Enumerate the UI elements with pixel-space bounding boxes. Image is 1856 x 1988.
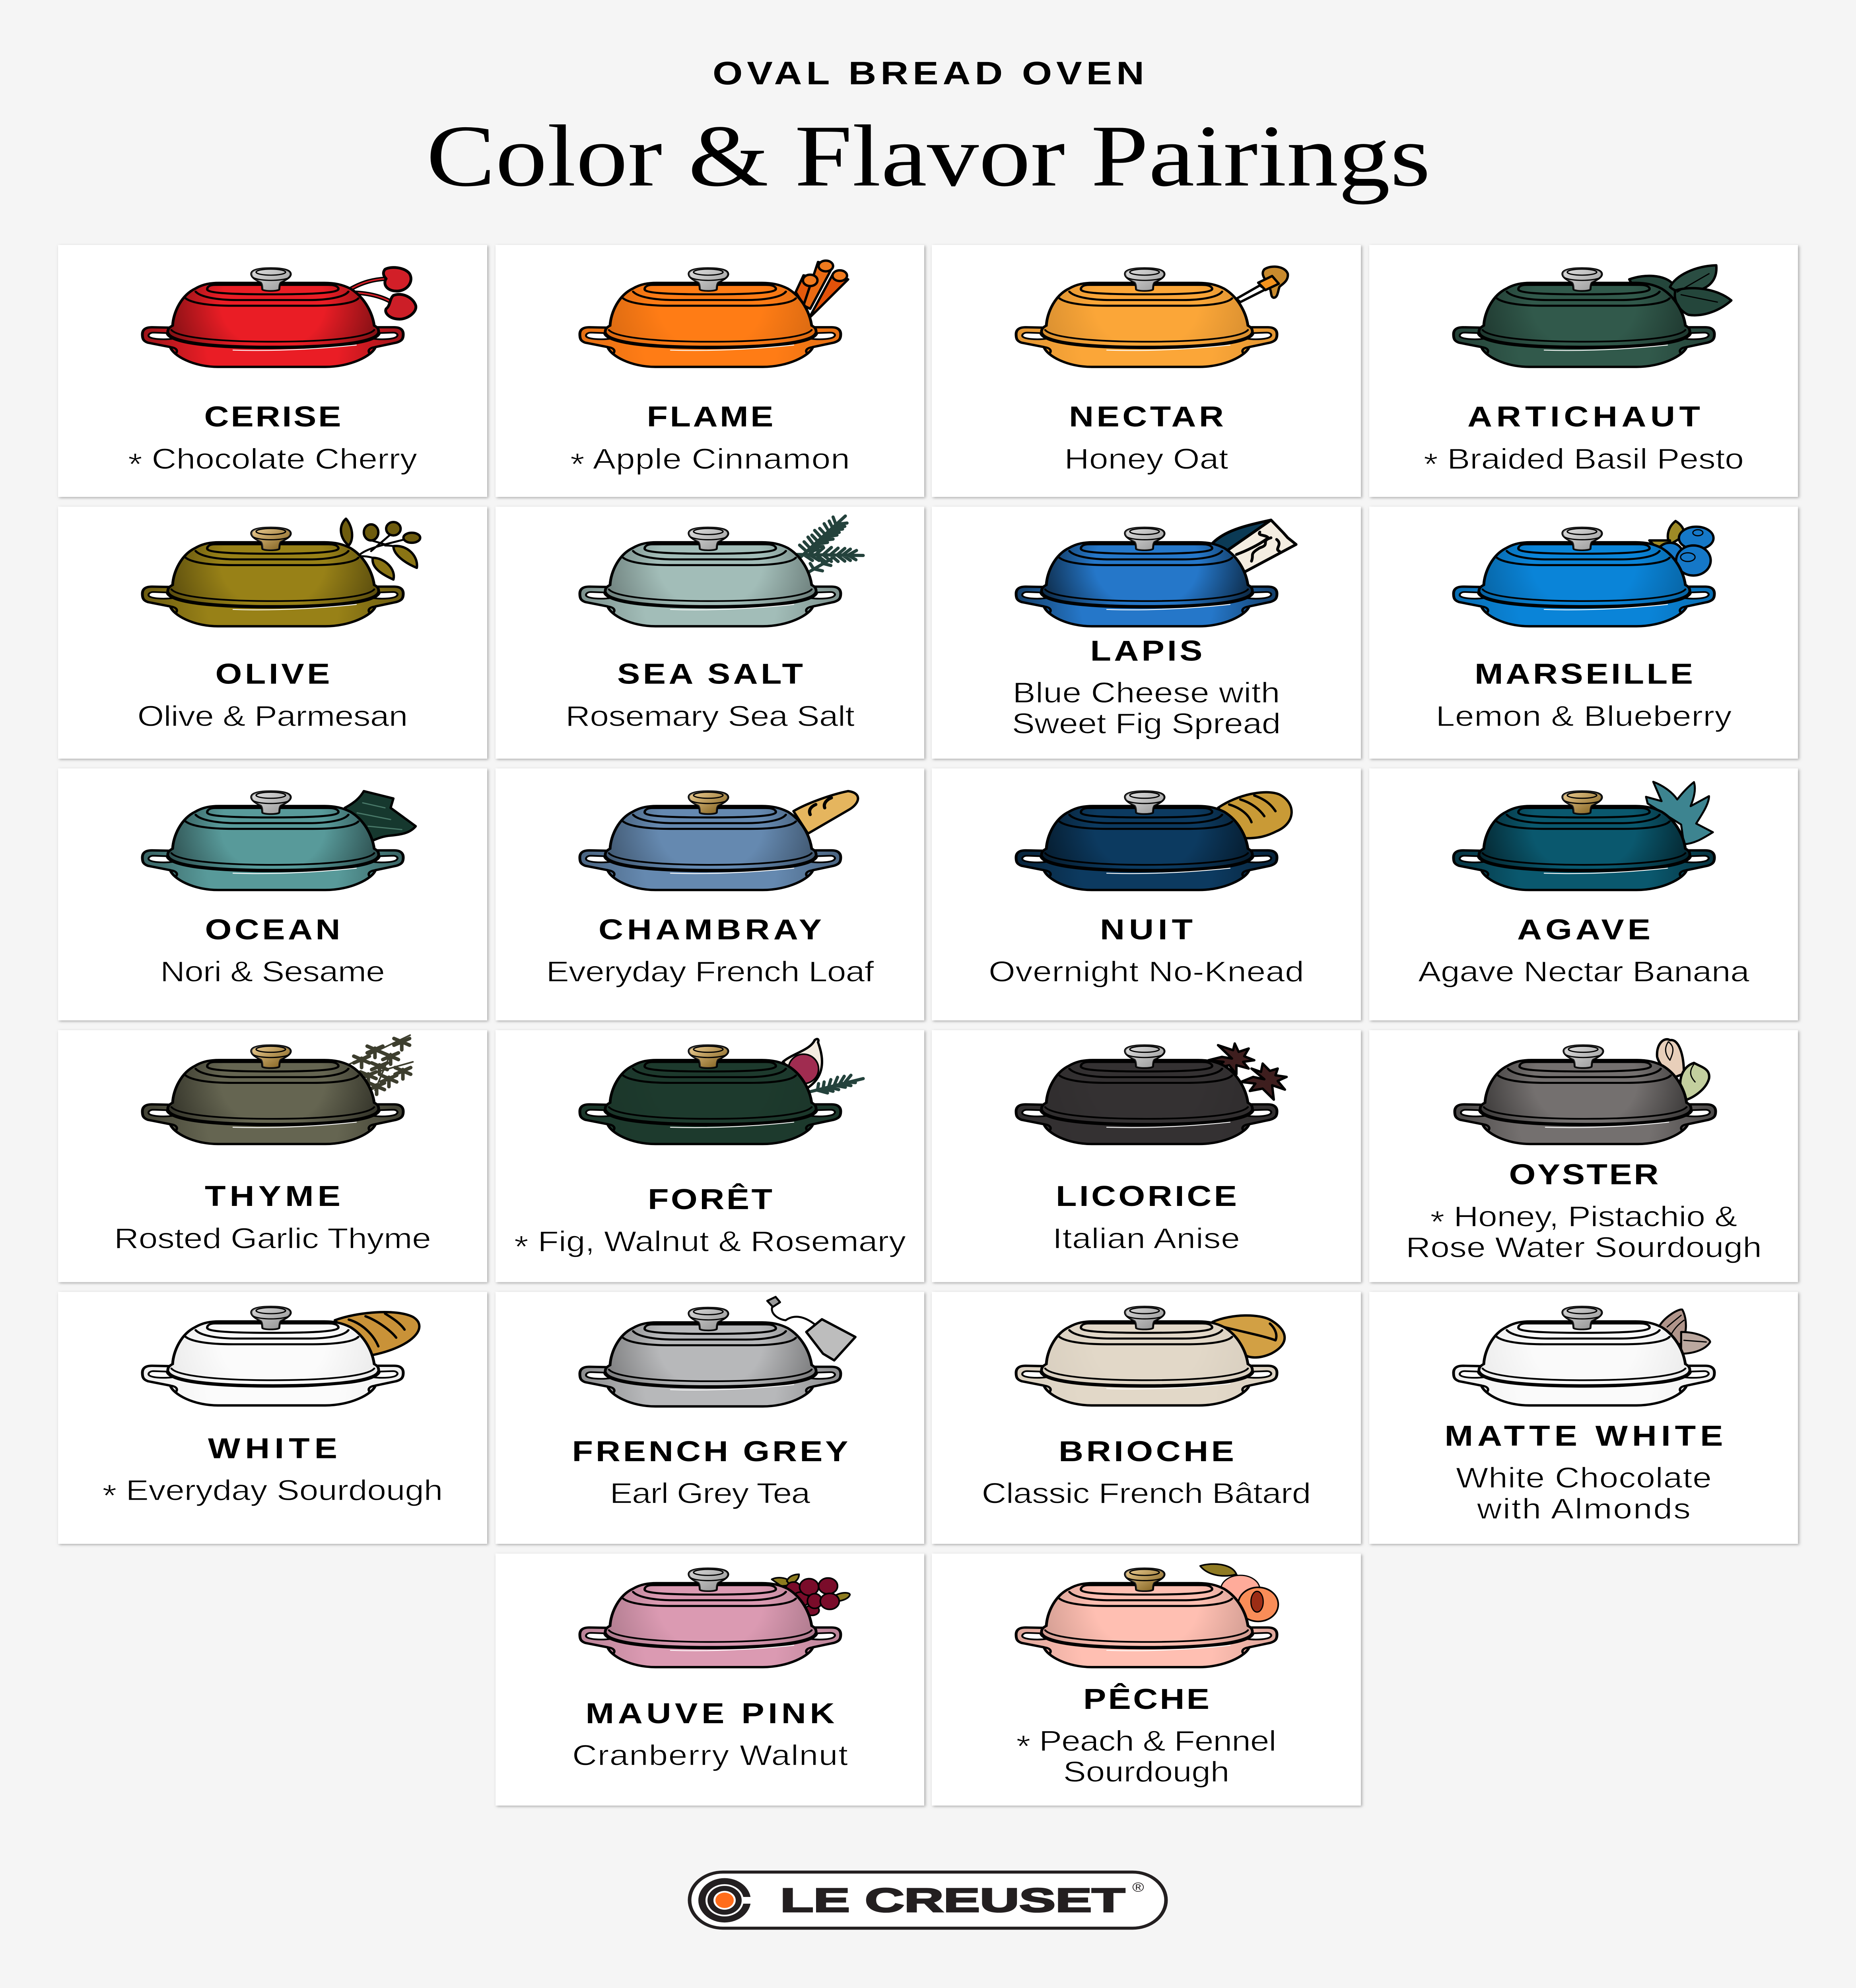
icon: baguette: [793, 791, 858, 834]
flavor: *: [103, 1479, 117, 1513]
icon: oven: [1016, 268, 1277, 367]
icon: oven: [142, 268, 403, 367]
flavor: Apple Cinnamon: [585, 443, 850, 475]
heading: FLAME: [647, 400, 773, 433]
icon: oven: [580, 528, 841, 626]
icon: sourdough loaf: [335, 1312, 419, 1355]
icon: oven: [142, 1307, 403, 1406]
heading: LICORICE: [1056, 1180, 1237, 1212]
flavor: two lines: [1012, 676, 1281, 740]
panel: White: [58, 1292, 487, 1544]
flavor: *: [570, 447, 585, 481]
icon: oven: [1454, 791, 1714, 890]
heading: NECTAR: [1069, 400, 1224, 433]
flavor: Braided Basil Pesto: [1438, 443, 1744, 475]
icon: oven: [1016, 528, 1277, 626]
flavor: Olive & Parmesan: [138, 700, 408, 732]
logo: Le Creuset: ®: [1132, 1879, 1144, 1895]
icon: oven: [1454, 268, 1714, 367]
icon: nori: [345, 791, 416, 841]
icon: thyme sprigs: [347, 1035, 413, 1094]
icon: basil leaves: [1629, 265, 1732, 315]
flavor: Rosted Garlic Thyme: [114, 1222, 431, 1254]
flavor: two lines: Sweet Fig Spread: [1012, 707, 1281, 740]
flavor: Nori & Sesame: [160, 955, 385, 988]
heading: FRENCH GREY: [572, 1435, 848, 1468]
icon: star anise: [1209, 1043, 1287, 1100]
icon: blueberries: [1649, 521, 1714, 575]
flavor: two lines: *: [1430, 1205, 1444, 1239]
heading: OYSTER: [1509, 1158, 1658, 1190]
icon: round loaf: [1218, 792, 1292, 838]
heading: CERISE: [204, 400, 341, 433]
icon: honey dipper: [1236, 267, 1288, 302]
flavor: two lines: *: [1016, 1729, 1030, 1764]
flavor: two lines: Blue Cheese with: [1013, 676, 1280, 709]
heading: PÊCHE: [1083, 1683, 1209, 1715]
panel: Thyme: [58, 1030, 487, 1282]
flavor: Chocolate Cherry: [142, 443, 417, 475]
flavor: two lines: Peach & Fennel: [1030, 1725, 1276, 1757]
panel: French Grey: [496, 1292, 924, 1544]
heading: FORÊT: [648, 1183, 772, 1215]
logo: Le Creuset: LE CREUSET: [780, 1881, 1125, 1919]
heading: BRIOCHE: [1059, 1435, 1234, 1468]
panel: Nectar: [932, 245, 1361, 497]
icon: oven: [142, 528, 403, 626]
panel: Forêt: [496, 1030, 924, 1282]
flavor: Lemon & Blueberry: [1436, 700, 1732, 732]
flavor: Cranberry Walnut: [572, 1739, 848, 1771]
flavor: two lines: [1016, 1725, 1277, 1788]
icon: cranberries: [772, 1574, 850, 1615]
panel: Nuit: [932, 769, 1361, 1020]
icon: tea bag: [767, 1297, 855, 1360]
flavor: *: [128, 447, 142, 481]
heading: WHITE: [208, 1432, 337, 1464]
panel: Oyster: [1369, 1030, 1798, 1282]
flavor: two lines: Rose Water Sourdough: [1406, 1231, 1762, 1264]
panel: Artichaut: [1369, 245, 1798, 497]
icon: oven: [1016, 1569, 1277, 1667]
panel: Agave: [1369, 769, 1798, 1020]
flavor: *: [1424, 447, 1438, 481]
flavor: two lines: Sourdough: [1063, 1755, 1230, 1788]
flavor: Overnight No-Knead: [989, 955, 1304, 988]
icon: peach: [1200, 1564, 1278, 1621]
panel: Sea Salt: [496, 507, 924, 759]
icon: rosemary: [795, 516, 863, 573]
flavor: two lines: [1406, 1200, 1762, 1264]
icon: olive branch: [341, 519, 420, 580]
icon: oven: [142, 791, 403, 890]
icon: oven: [1455, 1045, 1716, 1144]
flavor: Rosemary Sea Salt: [566, 700, 855, 732]
icon: oven: [1016, 1307, 1277, 1406]
panel: Pêche: [932, 1553, 1361, 1806]
heading: CHAMBRAY: [599, 913, 822, 945]
icon: agave leaves: [1646, 782, 1713, 844]
icon: rose buds: [1657, 1039, 1709, 1100]
icon: oven: [1016, 1045, 1277, 1144]
icon: oven: [1454, 1307, 1714, 1406]
icon: oven: [142, 1045, 403, 1144]
icon: oven: [580, 1569, 841, 1667]
icon: cherries: [350, 268, 416, 319]
icon: oven: [580, 268, 841, 367]
heading: MATTE WHITE: [1444, 1419, 1723, 1452]
flavor: two lines: Honey, Pistachio &: [1444, 1200, 1737, 1233]
flavor: two lines: with Almonds: [1477, 1493, 1691, 1525]
panel: Brioche: [932, 1292, 1361, 1544]
heading: THYME: [205, 1180, 340, 1212]
flavor: two lines: [1456, 1462, 1712, 1525]
icon: oven: [1016, 791, 1277, 890]
icon: blue cheese: [1211, 520, 1296, 572]
heading: LAPIS: [1090, 635, 1203, 667]
flavor: Fig, Walnut & Rosemary: [529, 1225, 906, 1257]
icon: oven: [580, 1308, 841, 1406]
subtitle: Oval Bread Oven: OVAL BREAD OVEN: [713, 55, 1144, 91]
heading: MARSEILLE: [1475, 658, 1693, 690]
flavor: Agave Nectar Banana: [1418, 955, 1750, 988]
flavor: *: [514, 1230, 529, 1264]
panel: Cerise: [58, 245, 487, 497]
flavor: Earl Grey Tea: [610, 1477, 810, 1509]
panel: Mauve Pink: [496, 1553, 924, 1806]
heading: OLIVE: [216, 658, 330, 690]
heading: AGAVE: [1517, 913, 1650, 945]
title: Color & Flavor Pairings: Color & Flavor Pairings: [426, 107, 1430, 205]
flavor: Classic French Bâtard: [981, 1477, 1311, 1509]
icon: oven: [580, 1045, 841, 1144]
icon: almonds: [1659, 1309, 1710, 1354]
heading: SEA SALT: [617, 658, 803, 690]
icon: batard: [1213, 1315, 1285, 1357]
panel: Marseille: [1369, 507, 1798, 759]
panel: Olive: [58, 507, 487, 759]
panel: Matte White: [1369, 1292, 1798, 1544]
heading: ARTICHAUT: [1467, 400, 1700, 433]
heading: NUIT: [1100, 913, 1193, 945]
flavor: Everyday Sourdough: [117, 1474, 443, 1507]
logo: Le Creuset: [690, 1872, 1166, 1928]
panel: Ocean: [58, 769, 487, 1020]
icon: cinnamon sticks: [796, 261, 848, 318]
panel: Licorice: [932, 1030, 1361, 1282]
flavor: two lines: White Chocolate: [1456, 1462, 1712, 1494]
flavor: Everyday French Loaf: [546, 955, 874, 988]
heading: MAUVE PINK: [586, 1697, 835, 1730]
panel: Lapis: [932, 507, 1361, 759]
icon: oven: [1454, 528, 1714, 626]
panel: Chambray: [496, 769, 924, 1020]
flavor: Honey Oat: [1064, 443, 1228, 475]
icon: oven: [580, 791, 841, 890]
icon: rosemary and fig: [783, 1039, 863, 1093]
flavor: Italian Anise: [1053, 1222, 1240, 1254]
panel: Flame: [496, 245, 924, 497]
heading: OCEAN: [205, 913, 340, 945]
